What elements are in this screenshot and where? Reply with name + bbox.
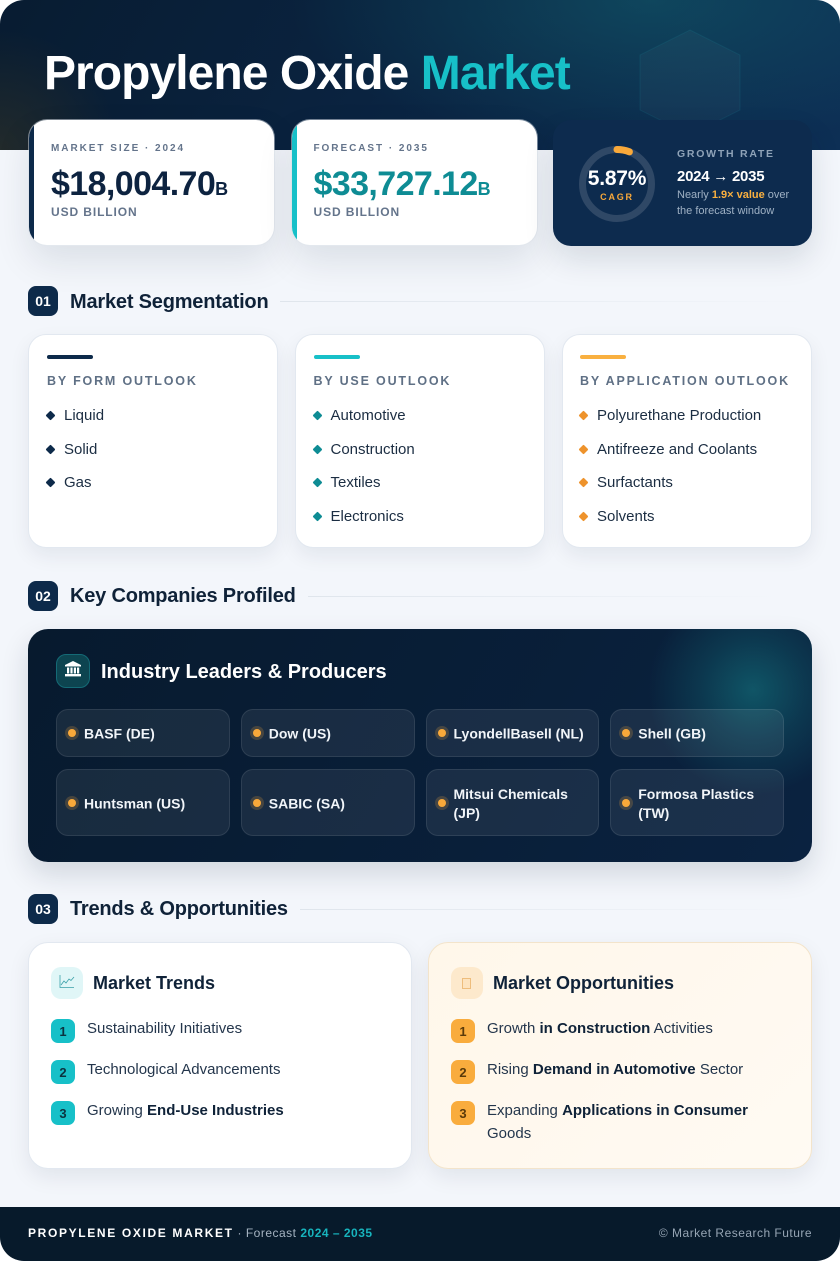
trend 1 <box>51 1019 75 1043</box>
stat card: growth rate <box>553 120 812 246</box>
trend 3 <box>51 1101 75 1125</box>
market size label: MARKET SIZE · 2024 <box>51 143 185 154</box>
panel: by application outlook: Polyurethane Production <box>597 406 761 424</box>
decorative hexagon <box>640 30 740 120</box>
trends heading: Market Trends <box>93 973 215 993</box>
opportunities heading: Market Opportunities <box>493 973 674 993</box>
panel: by use outlook: Textiles <box>330 474 381 490</box>
opportunity 2: 2 <box>459 1065 467 1080</box>
panel: by application outlook <box>562 334 812 548</box>
title: Propylene Oxide Market <box>44 47 570 100</box>
panel: by use outlook: Electronics <box>330 508 404 524</box>
forecast label: FORECAST · 2035 <box>314 143 429 154</box>
company: BASF: BASF (DE) <box>84 726 155 742</box>
section heading: market segmentation: Market Segmentation <box>70 290 268 312</box>
forecast value: $33,727.12B <box>314 165 491 203</box>
panel: market opportunities <box>428 942 812 1169</box>
icon: bank <box>56 654 90 688</box>
market size value: $18,004.70B <box>51 165 228 203</box>
trend 3: 3 <box>59 1106 67 1121</box>
panel: market trends: Sustainability Initiatives <box>87 1020 242 1037</box>
section badge 01 <box>28 286 58 316</box>
opportunity 1 <box>451 1019 475 1043</box>
panel: by form outlook <box>28 334 278 548</box>
panel heading: Industry Leaders & Producers <box>101 660 387 682</box>
use heading: BY USE OUTLOOK <box>314 374 451 388</box>
stat card: forecast <box>292 120 536 245</box>
opportunity 1: 1 <box>459 1024 467 1039</box>
company: Huntsman <box>56 769 230 836</box>
application heading: BY APPLICATION OUTLOOK <box>580 374 790 388</box>
section badge 01: 01 <box>35 293 51 309</box>
CAGR ring chart <box>579 146 655 222</box>
year range: 2024 → 2035 <box>677 168 764 184</box>
form heading: BY FORM OUTLOOK <box>47 374 198 388</box>
header banner <box>0 0 840 150</box>
panel: industry leaders <box>28 629 812 862</box>
growth description: Nearly 1.9× value over <box>677 189 789 201</box>
trend 1: 1 <box>59 1024 67 1039</box>
company: Dow <box>241 709 414 757</box>
company: Dow: Dow (US) <box>269 726 331 742</box>
company: Formosa: Formosa Plastics (TW) <box>638 786 754 820</box>
panel: by application outlook: Solvents <box>597 508 655 524</box>
panel: market trends: Technological Advancements <box>87 1061 280 1078</box>
section badge 02: 02 <box>35 588 51 604</box>
company: BASF <box>56 709 230 757</box>
panel: by form outlook: Liquid <box>64 406 104 424</box>
company: Huntsman: Huntsman (US) <box>84 795 185 811</box>
trend 2: 2 <box>59 1065 67 1080</box>
panel: by form outlook: Gas <box>64 474 92 490</box>
panel: by use outlook: Automotive <box>330 406 406 424</box>
icon: opportunity box <box>451 967 483 999</box>
opportunity 2 <box>451 1060 475 1084</box>
forecast unit: USD BILLION <box>314 205 400 219</box>
panel: by application outlook: Surfactants <box>597 474 673 490</box>
section badge 03 <box>28 894 58 924</box>
panel: market opportunities: Rising Demand in Automotive Sector <box>487 1061 743 1078</box>
CAGR label: CAGR <box>600 192 634 202</box>
company: SABIC <box>241 769 414 836</box>
company: Shell: Shell (GB) <box>638 726 706 742</box>
section badge 02 <box>28 581 58 611</box>
panel: by use outlook <box>295 334 545 548</box>
company: Formosa <box>610 769 784 836</box>
footer left text: PROPYLENE OXIDE MARKET · Forecast 2024 – 2035 <box>28 1226 373 1240</box>
panel: by use outlook: Construction <box>330 440 415 458</box>
footer <box>0 1207 840 1261</box>
opportunity 3: 3 <box>459 1106 467 1121</box>
panel: market trends <box>28 942 412 1169</box>
market size unit: USD BILLION <box>51 205 138 219</box>
opportunity 3 <box>451 1101 475 1125</box>
company: SABIC: SABIC (SA) <box>269 795 345 811</box>
section badge 03: 03 <box>35 901 51 917</box>
footer copyright: © Market Research Future <box>659 1226 812 1240</box>
icon: chart <box>51 967 83 999</box>
growth rate label: GROWTH RATE <box>677 148 775 160</box>
panel: by form outlook: Solid <box>64 440 97 458</box>
panel: market trends: Growing End-Use Industries <box>87 1102 284 1119</box>
CAGR value: 5.87% <box>588 167 646 190</box>
growth description: the forecast window <box>677 205 774 217</box>
company: LyondellBasell: LyondellBasell (NL) <box>454 726 584 742</box>
panel: by application outlook: Antifreeze and Coolants <box>597 440 757 458</box>
company: LyondellBasell <box>426 709 599 757</box>
panel: market opportunities: Expanding Applications in Consumer Goods <box>487 1102 748 1142</box>
growth description <box>677 189 789 217</box>
panel: market opportunities: Growth in Construction Activities <box>487 1020 713 1037</box>
company: Mitsui <box>426 769 599 836</box>
section heading: trends: Trends & Opportunities <box>70 898 288 920</box>
section heading: key companies: Key Companies Profiled <box>70 584 296 606</box>
company: Shell <box>610 709 784 757</box>
company: Mitsui: Mitsui Chemicals (JP) <box>454 786 568 820</box>
trend 2 <box>51 1060 75 1084</box>
stat card: market size <box>29 120 274 245</box>
